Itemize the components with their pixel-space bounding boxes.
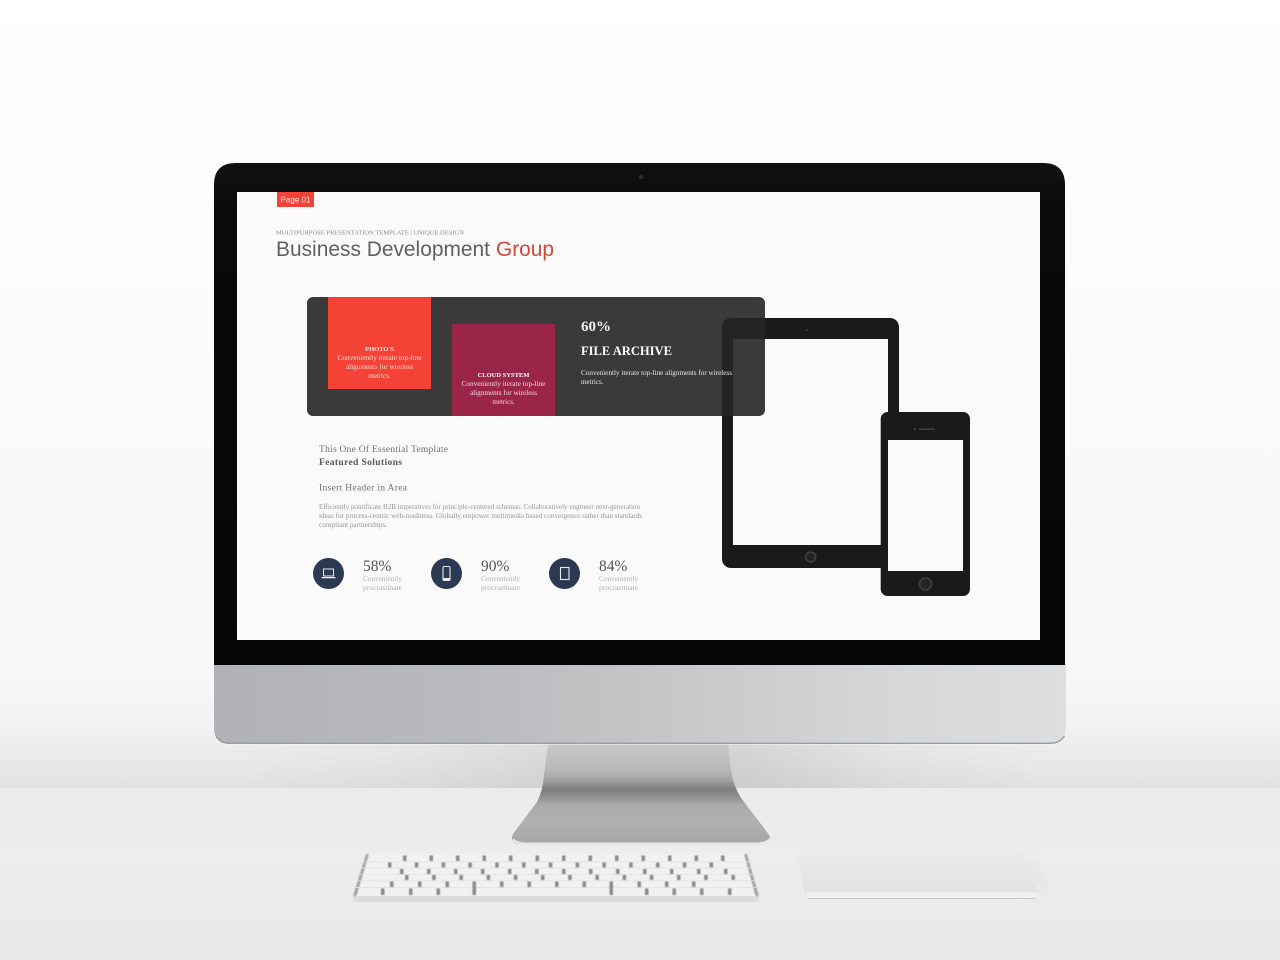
tablet screen (733, 339, 888, 545)
icon: phone (431, 558, 462, 589)
tablet camera (806, 329, 808, 331)
panel: photos card: alignments for wireless (346, 363, 413, 371)
file archive text: Conveniently iterate top-line alignments for wireless (581, 369, 732, 377)
panel: photos card: Conveniently iterate top-line (338, 354, 422, 362)
body paragraph: Efficiently pontificate B2B imperatives for principle-centered schemas. Collaboratively engineer next-generation (319, 504, 641, 511)
trackpad shadow (1022, 860, 1052, 892)
desk surface (0, 788, 1280, 960)
trackpad (797, 852, 1038, 898)
heading accent: Group (496, 238, 554, 261)
stat: phone 90%: Conveniently (481, 575, 521, 583)
stat: phone 90%: procrastinate (481, 584, 520, 592)
sub-heading: Insert Header in Area (319, 484, 408, 494)
icon: laptop (313, 558, 344, 589)
stat: phone 90%: 90% (481, 558, 510, 575)
monitor (213, 162, 1067, 846)
screen slide (237, 192, 1040, 640)
keyboard (353, 854, 759, 902)
webcam (639, 175, 643, 179)
stat: laptop 58% (313, 558, 403, 592)
phone camera (914, 428, 916, 430)
heading: Business Development (276, 238, 490, 261)
featured solutions text: Featured Solutions (319, 458, 402, 468)
phone home button (920, 578, 932, 590)
panel: cloud system card (452, 324, 555, 416)
stat: laptop 58%: Conveniently (363, 575, 403, 583)
page tag: Page 01 (281, 196, 311, 204)
panel: photos card: metrics. (368, 372, 391, 380)
panel: photos card (328, 297, 431, 389)
stat: phone 90% (431, 558, 521, 592)
monitor cast shadow (240, 740, 1040, 788)
title block (276, 230, 554, 261)
icon: tablet (549, 558, 580, 589)
tablet device (722, 318, 899, 568)
panel: dark feature band (307, 297, 765, 416)
panel: photos card: PHOTO'S (365, 346, 394, 353)
tablet home button (806, 552, 816, 562)
keyboard key gaps (381, 856, 735, 895)
monitor outline halo (213, 162, 1067, 744)
stand foot highlight (513, 838, 770, 846)
phone speaker (919, 428, 935, 430)
body paragraph: compliant partnerships. (319, 522, 387, 529)
panel: cloud system card: CLOUD SYSTEM (478, 372, 529, 379)
file archive text: 60% (581, 319, 611, 335)
stat: tablet 84%: 84% (599, 558, 628, 575)
panel: cloud system card: metrics. (492, 398, 515, 406)
panel: cloud system card: alignments for wireless (470, 389, 537, 397)
monitor stand (512, 744, 770, 845)
kicker text: MULTIPURPOSE PRESENTATION TEMPLATE | UNIQUE DESIGN (276, 230, 464, 236)
phone screen (888, 440, 963, 571)
panel: cloud system card: Conveniently iterate top-line (462, 380, 546, 388)
stat: tablet 84%: Conveniently (599, 575, 639, 583)
stat: tablet 84%: procrastinate (599, 584, 638, 592)
stat: tablet 84% (549, 558, 639, 592)
monitor chin edge (216, 736, 1064, 743)
monitor bezel (214, 163, 1065, 665)
file archive text: metrics. (581, 378, 604, 386)
phone device (881, 412, 970, 596)
stat: laptop 58%: 58% (363, 558, 392, 575)
file archive text: FILE ARCHIVE (581, 343, 672, 358)
body paragraph: ideas for process-centric web-readiness. Globally empower multimedia based convergence rather than standards (319, 513, 642, 520)
featured solutions text: This One Of Essential Template (319, 444, 448, 455)
file archive text (581, 319, 732, 386)
stat: laptop 58%: procrastinate (363, 584, 402, 592)
page tag (277, 192, 314, 207)
featured solutions text (319, 444, 642, 529)
monitor chin (214, 664, 1066, 744)
body paragraph (319, 504, 642, 529)
